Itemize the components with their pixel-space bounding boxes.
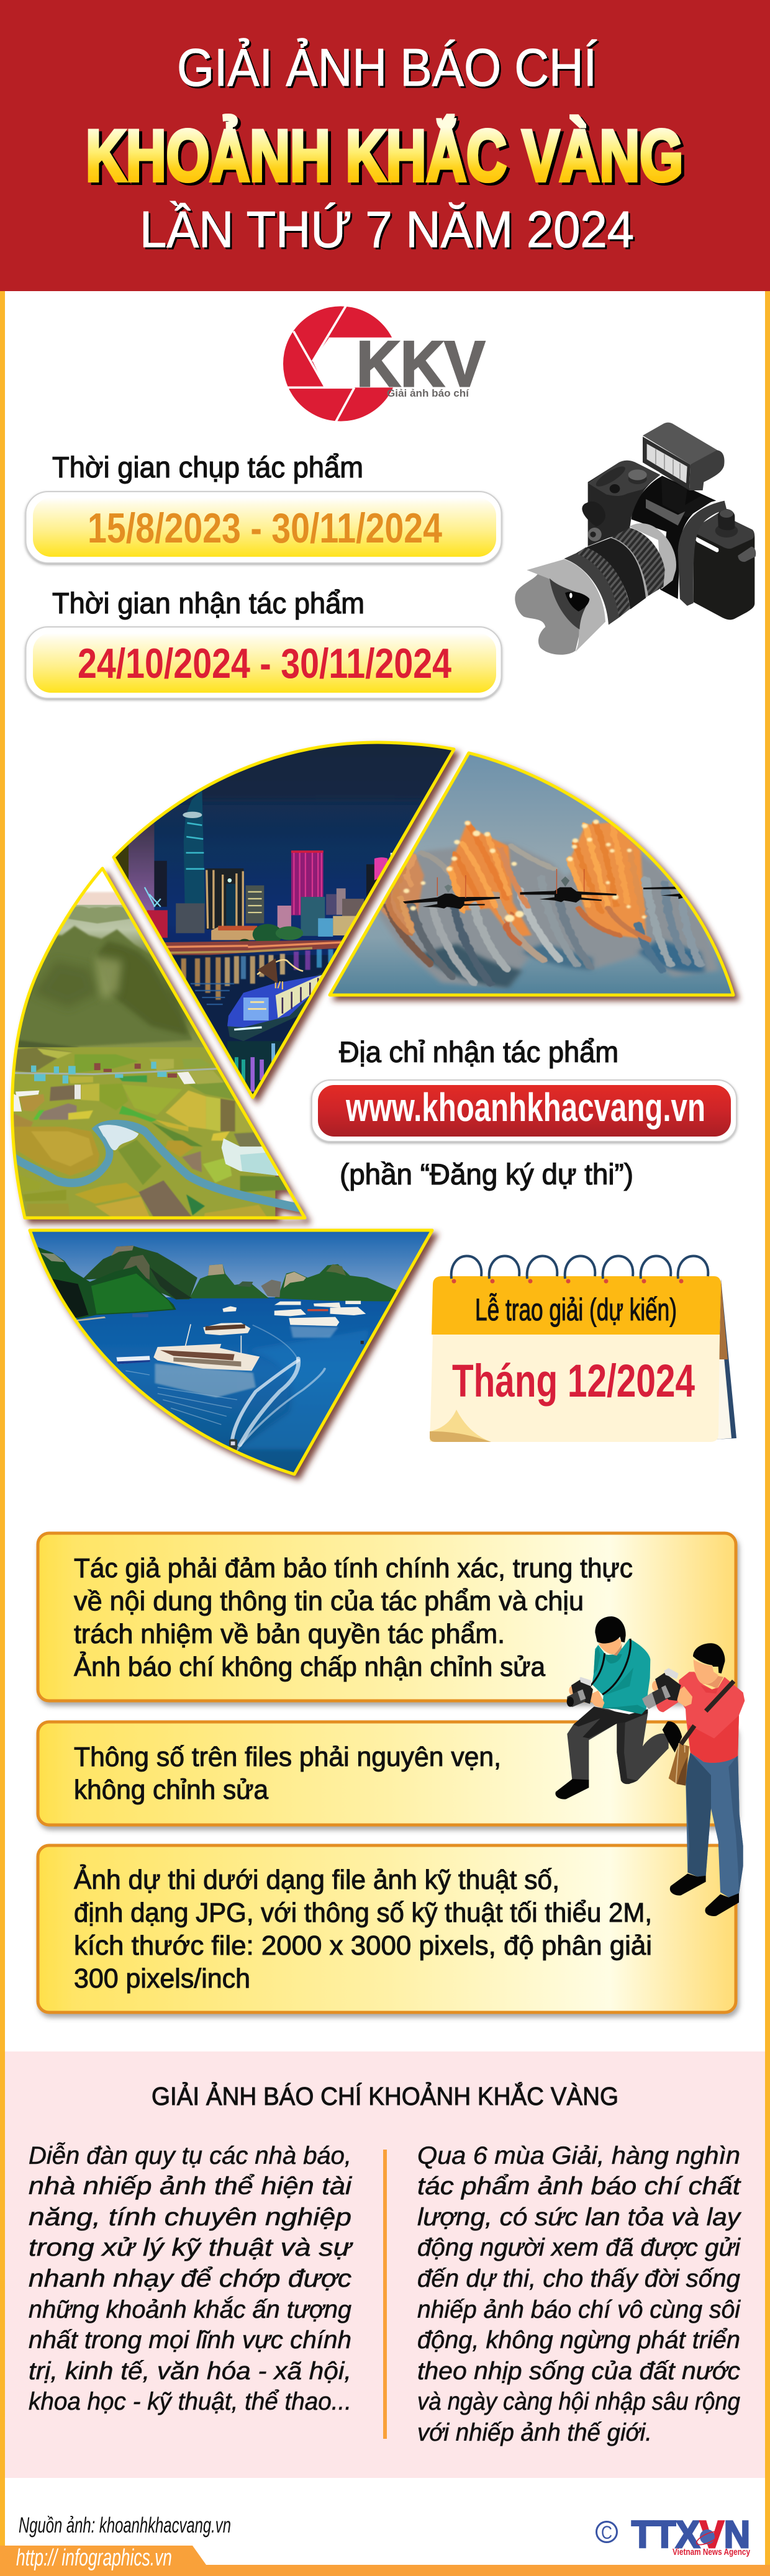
left column text (29, 2141, 353, 2415)
right column text: đến dự thi, cho thấy đời sống (417, 2265, 740, 2292)
footer band with url: http:// infographics.vn (16, 2545, 172, 2571)
right column text: tác phẩm ảnh báo chí chất (417, 2173, 741, 2200)
pill: shooting dates: 15/8/2023 - 30/11/2024 (88, 505, 442, 552)
flare masses (449, 826, 532, 937)
label: submission period: Thời gian nhận tác phẩm (52, 587, 365, 619)
calendar rings (451, 1256, 708, 1279)
logo TTXVN: TTXVN (632, 2513, 750, 2556)
right column text: với nhiếp ảnh thế giới. (417, 2419, 652, 2446)
left column text: khoa học - kỹ thuật, thể thao... (29, 2388, 351, 2415)
card: file parameters (38, 1722, 736, 1825)
page fold (430, 1410, 491, 1442)
photo slice: terraced fields and river (6, 863, 310, 1222)
card: file parameters: Thông số trên files phải nguyên vẹn, (74, 1742, 501, 1772)
pill: website (312, 1080, 736, 1142)
right column text: Qua 6 mùa Giải, hàng nghìn (417, 2142, 740, 2169)
left column text: trong xử lý kỹ thuật và sự (29, 2234, 353, 2261)
left column text: trị, kinh tế, văn hóa - xã hội, (29, 2358, 351, 2385)
right column text: động người xem đã được gửi (417, 2234, 741, 2261)
photo slice: fighter jets with flares (323, 745, 745, 1001)
label: shooting period: Thời gian chụp tác phẩm (52, 451, 363, 484)
header banner (0, 0, 770, 291)
left column text: Diễn đàn quy tụ các nhà báo, (29, 2141, 351, 2169)
card: authenticity rules: về nội dung thông tin của tác phẩm và chịu (74, 1586, 584, 1616)
logo KKV (283, 305, 485, 422)
pill: shooting dates (26, 492, 502, 563)
title line 1: GIẢI ẢNH BÁO CHÍ (177, 38, 597, 97)
calendar date: Tháng 12/2024 (452, 1355, 695, 1407)
card: technical specifications (38, 1845, 736, 2012)
logo TTXVN: Vietnam News Agency (673, 2547, 750, 2557)
smoke base mass (378, 836, 719, 987)
left column text: năng, tính chuyên nghiệp (29, 2204, 351, 2231)
pill: submission dates (26, 627, 502, 698)
card: technical specifications: định dạng JPG, với thông số kỹ thuật tối thiểu 2M, (74, 1898, 652, 1928)
photo slice: city at night (106, 741, 466, 1108)
left orange edge (0, 291, 5, 2551)
card: technical specifications: 300 pixels/inch (74, 1963, 250, 1994)
copyright mark (596, 2521, 617, 2543)
calendar back pages (715, 1279, 736, 1439)
card: technical specifications: Ảnh dự thi dưới dạng file ảnh kỹ thuật số, (74, 1864, 559, 1895)
left column text: nhà nhiếp ảnh thể hiện tài (29, 2173, 352, 2200)
camera raised (642, 1668, 681, 1709)
left column text: nhất trong mọi lĩnh vực chính (29, 2326, 351, 2354)
icon: camera (515, 423, 756, 655)
card: authenticity rules (38, 1533, 736, 1701)
page fold underside (430, 1431, 491, 1442)
note: registration section: (phần “Đăng ký dự thi”) (340, 1158, 633, 1191)
right column text: theo nhịp sống của đất nước (417, 2358, 740, 2385)
footer band with url (0, 2545, 770, 2576)
right column text: lượng, có sức lan tỏa và lay (417, 2204, 742, 2231)
card: authenticity rules: trách nhiệm về bản quyền tác phẩm. (74, 1619, 505, 1649)
calendar header band (432, 1276, 721, 1335)
right orange edge (765, 291, 770, 2569)
pill: submission dates: 24/10/2024 - 30/11/2024 (78, 640, 451, 687)
right column text: nhiếp ảnh báo chí vô cùng sôi (417, 2296, 741, 2323)
card: technical specifications: kích thước file: 2000 x 3000 pixels, độ phân giải (74, 1930, 652, 1961)
card: authenticity rules: Tác giả phải đảm bảo tính chính xác, trung thực (74, 1553, 633, 1583)
left column text: nhanh nhạy để chớp được (29, 2265, 351, 2292)
camera in hands (567, 1677, 593, 1707)
kneeling photographer (555, 1616, 682, 1799)
calendar (430, 1256, 736, 1442)
title line 3: LẦN THỨ 7 NĂM 2024 (140, 200, 634, 258)
info panel: about the award (5, 2051, 765, 2478)
card: file parameters: không chỉnh sửa (74, 1775, 269, 1805)
photo slice: Ha Long bay (25, 1226, 441, 1484)
copyright mark: C (601, 2523, 612, 2543)
calendar page (430, 1276, 721, 1442)
standing photographer (642, 1643, 745, 1916)
logo KKV: KKV (356, 328, 485, 400)
illustration: two photographers (555, 1616, 745, 1916)
logo KKV: Giải ảnh báo chí (387, 387, 469, 399)
calendar heading: Lễ trao giải (dự kiến) (475, 1292, 677, 1327)
card: authenticity rules: Ảnh báo chí không chấp nhận chỉnh sửa (74, 1651, 546, 1682)
right column text: động, không ngừng phát triển (417, 2326, 740, 2354)
right column text (417, 2142, 742, 2446)
label: submission address: Địa chỉ nhận tác phẩm (339, 1035, 618, 1068)
panel title: GIẢI ẢNH BÁO CHÍ KHOẢNH KHẮC VÀNG (152, 2082, 618, 2110)
ring holes (452, 1279, 683, 1284)
photo source credit: Nguồn ảnh: khoanhkhacvang.vn (19, 2513, 231, 2538)
right column text: và ngày càng hội nhập sâu rộng (417, 2388, 740, 2415)
left column text: những khoảnh khắc ấn tượng (29, 2295, 351, 2323)
column divider (383, 2150, 387, 2439)
